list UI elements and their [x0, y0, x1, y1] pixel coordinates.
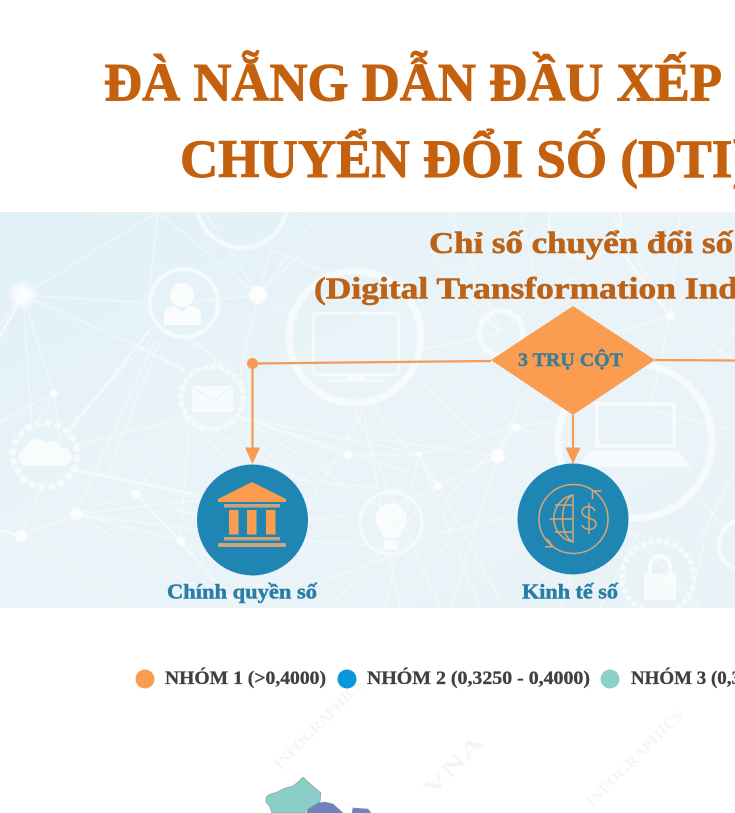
panel heading: Chỉ số chuyển đổi số [429, 225, 734, 260]
pillar: digital economy: Kinh tế số [522, 580, 619, 604]
panel heading: (Digital Transformation Ind [314, 270, 735, 306]
connector lines and arrows [252, 360, 735, 448]
watermarks [272, 677, 687, 811]
icon: bulb [376, 503, 406, 550]
diamond: 3 pillars: 3 TRỤ CỘT [518, 349, 623, 371]
map fragment [266, 777, 371, 813]
legend item: group 2: NHÓM 2 (0,3250 - 0,4000) [367, 667, 590, 689]
pillar: digital government: Chính quyền số [167, 580, 318, 604]
icon: globe and dollar [539, 484, 608, 554]
legend item: group 1: NHÓM 1 (>0,4000) [165, 667, 326, 689]
legend [136, 667, 735, 689]
connector dot [247, 358, 258, 369]
pillar: digital government [167, 464, 318, 604]
panel: digital transformation index [0, 212, 735, 608]
icon: government building [218, 482, 286, 547]
title: ĐÀ NẴNG DẪN ĐẦU XẾP [104, 50, 722, 112]
pillar: digital economy [518, 464, 628, 604]
icon: cloud [18, 439, 72, 466]
icon: person [164, 283, 201, 325]
watermarks: VNA [418, 730, 489, 801]
watermarks: INFOGRAPHICS [272, 677, 368, 773]
icon: lock [644, 556, 676, 600]
icon: monitor [312, 312, 400, 382]
icon: laptop [578, 402, 691, 467]
panel heading [314, 225, 735, 306]
arrow head: left [245, 448, 260, 464]
diamond: 3 pillars [491, 306, 655, 415]
title [104, 50, 735, 189]
network nodes [7, 279, 674, 545]
arrow head: center [566, 448, 580, 464]
icon: envelope [192, 386, 233, 412]
network background [0, 212, 735, 608]
watermarks: INFOGRAPHICS [584, 708, 687, 811]
